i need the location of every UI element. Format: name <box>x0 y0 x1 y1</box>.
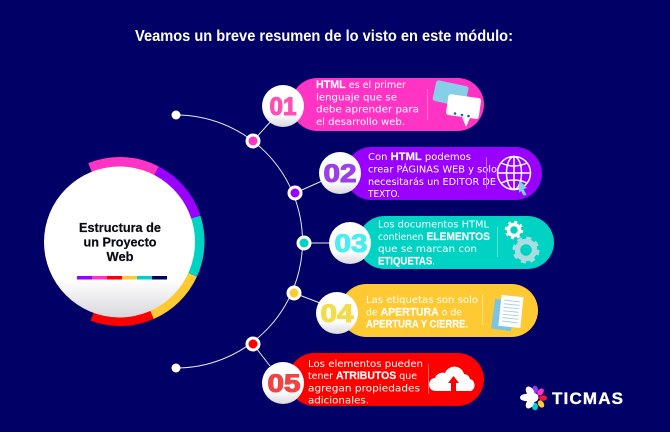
number 04 <box>316 292 358 334</box>
panel: item 05 <box>262 353 484 406</box>
icon: cloud upload <box>429 367 475 391</box>
divider 02 <box>486 157 487 189</box>
pill 03 <box>358 216 554 269</box>
text 03: Los documentos HTML <box>378 220 489 230</box>
number 03: 03 <box>334 230 368 258</box>
pill 01 <box>291 78 484 131</box>
panel: central circle <box>44 162 200 321</box>
text 01: HTML es el primer <box>316 79 407 91</box>
circle heading <box>79 221 161 264</box>
divider 01 <box>427 89 428 120</box>
divider 04 <box>482 295 483 325</box>
number 04: 04 <box>320 300 354 328</box>
number 05: 05 <box>268 370 301 398</box>
pill 02 <box>345 147 542 200</box>
divider 03 <box>497 227 498 257</box>
panel: item 03 <box>329 216 554 269</box>
text 04: APERTURA Y CIERRE. <box>366 318 468 330</box>
text 03: contienen ELEMENTOS <box>378 231 490 243</box>
text 05: Los elementos pueden <box>308 359 423 370</box>
text 01: debe aprender para <box>316 104 419 116</box>
icon: speech bubbles <box>432 80 481 127</box>
title: Veamos un breve resumen de lo visto en este módulo: <box>135 28 513 45</box>
icon: documents <box>491 295 524 331</box>
text 05: adicionales. <box>308 396 369 406</box>
panel: item 01 <box>262 78 484 131</box>
text 03: ETIQUETAS. <box>378 256 435 268</box>
coloured ring <box>90 162 200 321</box>
text 02: crear PÁGINAS WEB y solo <box>368 162 497 176</box>
text 01: el desarrollo web. <box>316 117 405 128</box>
text 03 <box>378 220 490 268</box>
panel: item 02 <box>319 147 542 200</box>
text 05 <box>308 359 423 406</box>
colour bar <box>77 276 167 280</box>
node 5 <box>247 338 259 350</box>
pill 04 <box>340 284 538 337</box>
circle heading: un Proyecto <box>84 236 157 250</box>
timeline end dot <box>172 364 180 372</box>
text 02 <box>367 151 497 200</box>
text 05: agregan propiedades <box>308 384 420 394</box>
panel: item 04 <box>316 284 538 337</box>
circle heading: Web <box>106 250 134 264</box>
text 01: lenguaje que se <box>316 92 397 104</box>
node 1 <box>247 135 259 147</box>
number 01: 01 <box>270 93 297 121</box>
text 01 <box>316 79 419 128</box>
text 02: necesitarás un EDITOR DE <box>368 176 496 188</box>
text 04: de APERTURA o de <box>366 306 462 318</box>
text 02: TEXTO. <box>367 189 400 200</box>
pill 05 <box>288 353 484 406</box>
number 01 <box>262 85 304 127</box>
divider 05 <box>428 364 429 394</box>
node 4 <box>288 287 300 299</box>
text 04: Las etiquetas son solo <box>366 295 478 306</box>
number 02 <box>319 152 361 194</box>
node 2 <box>289 187 301 199</box>
text 02: Con HTML podemos <box>368 151 471 163</box>
text 04 <box>366 295 478 330</box>
logo flower icon <box>520 385 547 410</box>
logo: TICMAS <box>520 385 623 410</box>
timeline start dot <box>172 110 180 120</box>
number 02: 02 <box>324 160 356 188</box>
timeline arc with connector lines <box>176 115 332 368</box>
icon: gears <box>506 222 538 262</box>
logo wordmark: TICMAS <box>552 389 623 408</box>
text 05: tener ATRIBUTOS que <box>308 370 417 382</box>
white disc <box>44 166 195 318</box>
number 03 <box>329 222 371 264</box>
text 03: que se marcan con <box>378 244 477 255</box>
icon: globe with cursor <box>498 156 530 196</box>
number 05 <box>262 362 304 404</box>
circle heading: Estructura de <box>79 221 161 235</box>
node 3 <box>298 237 310 249</box>
